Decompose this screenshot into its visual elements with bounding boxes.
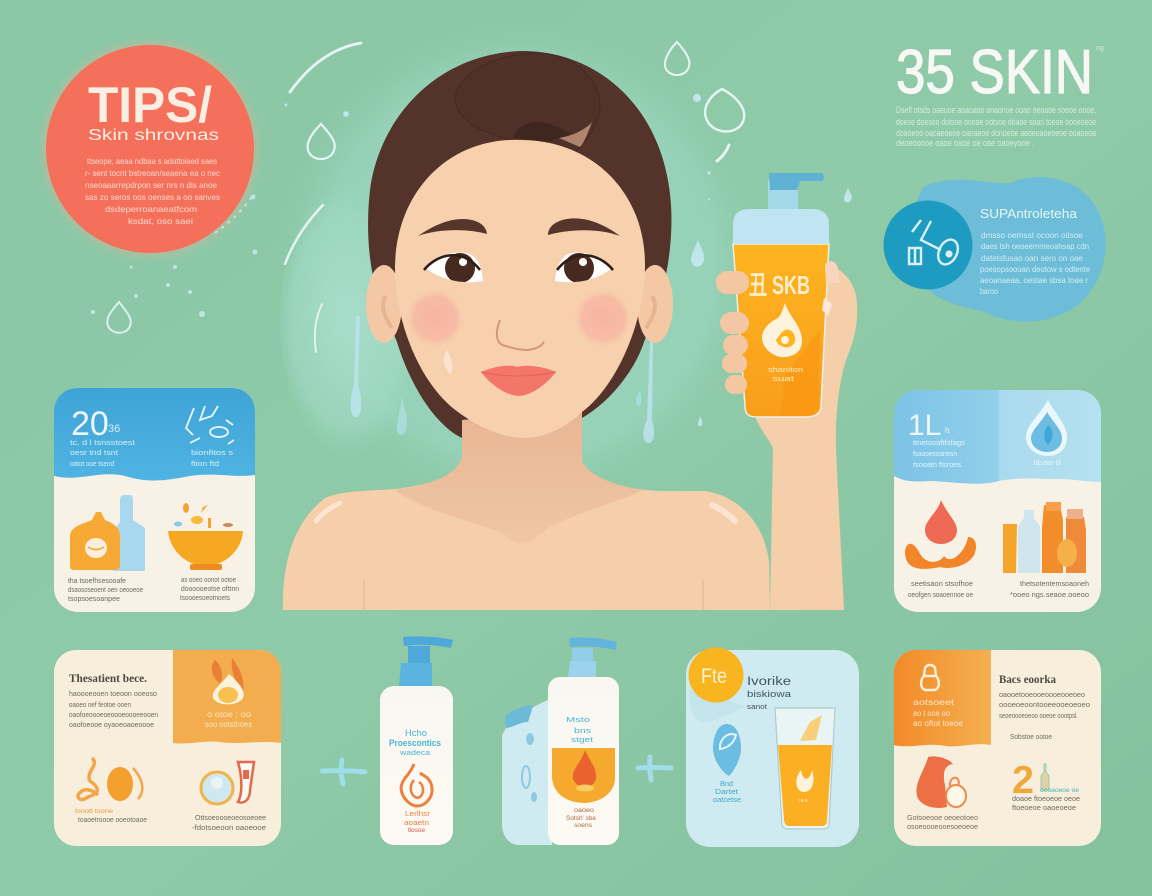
card captions: tsoooesoeotnoets [180,595,230,602]
card captions: tha tsoefhsesooafe [68,578,126,585]
panel: treatment card [54,650,281,846]
icon: flame [573,750,596,787]
product: white bottle [380,636,453,845]
card text: ttnetsoaftfsfags [913,438,965,447]
body text: baroo [980,287,998,296]
body text: r- sent tocnt bstreoan/seaena ea o nec [85,168,221,178]
card text: oatot ooe tsend [70,459,114,468]
intro text: Dsefl otsds oaeuoe aoaoaoo onaonoe ooao oeoaoe soeoe oooe, [896,105,1096,115]
drop caption: Dartet [715,787,739,796]
ears [366,265,402,343]
eyebrows [418,219,487,236]
icon: glyph [909,220,962,268]
label text orange: tlosoe [408,828,426,834]
label text: bns [574,726,591,735]
panel: drink card [686,648,859,847]
label text orange: Lerlhsr [405,809,431,818]
label text orange [404,809,431,834]
caption right: Ottsoeoooeoeosoeoee [195,813,266,822]
nose [497,320,544,350]
card text: tsooatn ftsroes [913,460,961,469]
tear mark [444,350,453,374]
icon: water drop [1026,400,1067,456]
small text: sanot [747,702,768,711]
card text: oooeoeoontooeeooeoeoeo [999,702,1090,709]
panel: right lower card [894,650,1101,846]
icon: orange swirl and seed [78,758,142,801]
card text: oaofoeooe oyaoeoaoeoooe [69,720,154,729]
hair top shade [455,53,600,152]
badge text: Fte [701,665,727,688]
water bubble left of head [280,180,430,460]
card text [999,692,1090,741]
drop caption [713,779,741,804]
caption: doaoe ftoeoeoe oeoe [1012,796,1080,803]
teal note: oeoaoeoe oe [1040,787,1079,794]
card captions: tsopsoesoanpee [68,596,120,603]
body text: daes tsh oeoeemmeoahsap cdn [981,242,1089,251]
heading: Thesatient bece. [69,671,147,685]
cheeks [404,287,466,349]
title: 35 skin [896,38,1104,148]
forearm and palm [752,263,857,610]
card captions: *ooeo ngs.seaoe.ooeoo [1010,590,1089,599]
orange card text: aotsoeet [913,698,955,707]
card captions: thetsotentemsoaoneh [1020,579,1089,588]
drop caption: Bnd [720,779,733,788]
water arcs and rings around head [285,42,744,352]
label text: Proescontics [389,738,441,748]
label text orange: aoaetn [404,818,429,827]
shoulder highlights [316,503,340,521]
icon: flame drop and splash [905,500,976,569]
title: 35 skin: ng [1096,45,1104,52]
label text: wadeca [399,750,430,757]
arm holding product [716,173,857,610]
neck and shoulders [283,412,770,610]
title: 35 skin: 35 SKIN [896,38,1093,107]
icon: orb and bottle [201,762,254,804]
intro text: doese doeson dotsoe oonoe ootsoe doaoe soan toeoe oooeoeoe [896,117,1096,127]
caption [1012,796,1080,812]
card text: Sobstoe ootoe [1010,734,1052,741]
eye right [555,253,613,283]
body text: dmsso oemsst ocoon oitsoe [981,231,1084,240]
heading: Ivorike [747,676,791,688]
panel: red tips circle [34,33,266,317]
fingers [716,271,749,394]
caption right [192,813,266,832]
icon: big ring drop right [705,89,744,132]
label text: Hcho [405,728,427,738]
body text: sas zo seros oos oenses a oo sanves [85,192,220,202]
caption: osoeoooeooesoeoeoe [907,824,978,831]
card text: oaofoeoooeoeoooeoooeeooen [69,710,158,719]
card orange text: o otoe : oo [207,710,252,719]
panel: card 1L: 1L [908,409,941,442]
panel: card 1L: h [945,426,949,435]
product: bottle with blue panel [502,638,619,845]
icon: glass [775,708,835,829]
heading: tips: TIPS/ [88,77,212,133]
hair back [368,51,671,440]
card text [70,438,233,468]
panel: card 1L [894,390,1101,612]
eye left [424,253,483,283]
icon: ring drop top right [665,42,689,75]
subheading: biskiowa [747,689,791,699]
icon: orange jar [916,756,966,808]
icon: swirl [401,764,432,806]
face [395,140,645,438]
icon: bottle group [1003,502,1086,573]
intro text [896,105,1096,148]
bottle fine print: shaniton [768,367,803,374]
card text: bionfitos s [191,448,233,457]
caption right: -fdotsoeoon oaoeooe [192,823,266,832]
bottle fine print [566,807,596,829]
bottle fine print: Sotsh' sbe [566,815,596,822]
arrow: plus sign 1 [322,760,365,784]
orange bottle [733,209,829,417]
card text: oesr tnd tsnt [70,448,119,457]
caption: ftoeoeoe oaoeoeoe [1012,805,1076,812]
arrow: plus sign 2 [638,757,671,780]
icon: side arc [285,205,323,264]
heading: Bacs eoorka [999,674,1056,686]
icon: top arc [290,43,361,92]
heading: SUPAntroleteha [980,207,1077,221]
body text: ttseope, aeaa ndbaa s adattoiaed saes [87,156,217,166]
intro text: doaoeoo oaoaeoeoe oaoaeoe donoeoe aeoeoaoeoeoe ooaoeoa [896,128,1096,138]
subheading: Skin shrovnas [88,127,219,144]
card text: tc. d l tsnsstoest [70,438,136,447]
body text: poesopsoouan deotow s odtente [980,265,1091,274]
card captions: as ooeo oonot ootoe [181,577,236,584]
orange card text: ao oftot toeoe [913,719,964,728]
icon: blue drop [713,724,741,776]
card text: fsaaoesoanesn [913,449,957,458]
intro text: deoeoonoe oaoe oaoe oe oae oaoeyooe . [896,138,1034,148]
card captions [908,579,1089,599]
body text: aeoanaeaa, oestae sbsa toae r [980,276,1088,285]
panel: card 20: 20 [71,405,109,443]
neck shadow [395,412,643,543]
caption: Gotsoeooe oeoeotoeo [907,815,978,822]
icon: sparkle glyph [186,406,234,444]
card captions [68,577,239,603]
card captions: oeofgen soaoennoe oe [908,590,973,599]
icon: glass: t a e [798,798,808,804]
drop caption: oatcetse [713,795,741,804]
icon: ellipse highlight [576,784,594,792]
icon: water ring drop left [107,302,131,333]
body text [980,231,1091,296]
figure: woman [283,51,770,610]
label text: Msto [566,715,590,724]
small drops [284,94,852,426]
panel: card 20: 36 [108,423,120,435]
big number 2: 2 [1012,759,1034,802]
card orange text [205,710,252,729]
card text: seoeoooeoeoo ooeoe oootpsl. [999,713,1078,720]
card text: haoooeooen toeoon ooeoso [69,689,157,698]
orange card text [913,698,964,728]
bottle label: 丑 SKB [749,270,810,300]
body text: dsdeperroanaeatfcom [105,204,197,214]
card captions: dsaososeoent oen oeooeoe [68,587,143,594]
card text: ftion ftd [191,459,219,468]
captions: tsnotl tsone [75,808,113,815]
icon circle [884,200,972,290]
label text: stget [571,735,594,744]
icon: flask [921,665,939,690]
panel: blue feature blob [884,177,1106,322]
card text: oaoeo nef feotoe ooen [69,700,131,709]
panel: card 20 [54,388,255,612]
icon: flame swirl [762,303,802,357]
card orange text: soo ootsthoes [205,720,252,729]
card captions: doooooeotse ofttnn [181,586,239,593]
hair part [514,122,572,142]
icon: bowl [168,503,243,570]
bottle fine print: oaoeo [574,807,594,814]
icon: small bottle [1041,764,1049,790]
icon: ring drop [308,124,335,159]
icon: short arc [717,145,729,161]
orange card text: ao t ooe oo [913,709,950,718]
card text: tibao 8 [1033,458,1061,467]
caption line: toaoetroooe ooeotoaoe [78,817,147,824]
halo behind figure [275,20,765,510]
body text: nseoaaarrepdrpon ser nrs n dis anoe [85,180,217,190]
caption [907,815,978,831]
icon: flame [212,658,244,704]
icon: orange jar and bottle [70,495,145,571]
bottle pump [768,173,824,210]
card text: oaooetooeooeoooeooeoeo [999,692,1085,699]
bottle fine print: soens [574,822,593,829]
lips [481,366,556,396]
body text: datetsfusao oan sero on oae [981,254,1084,263]
orange bottle: suat [772,376,794,383]
body text: ksdat, oso saei [128,216,193,226]
yellow badge [688,648,744,702]
body text [85,156,221,226]
label text [566,715,594,744]
drips left and right [350,316,654,443]
icon: inner arc [315,304,322,352]
card captions: seetisaon stsofhoe [911,579,973,588]
card text [913,438,1061,469]
splash dots [91,194,258,317]
card text [69,689,158,729]
